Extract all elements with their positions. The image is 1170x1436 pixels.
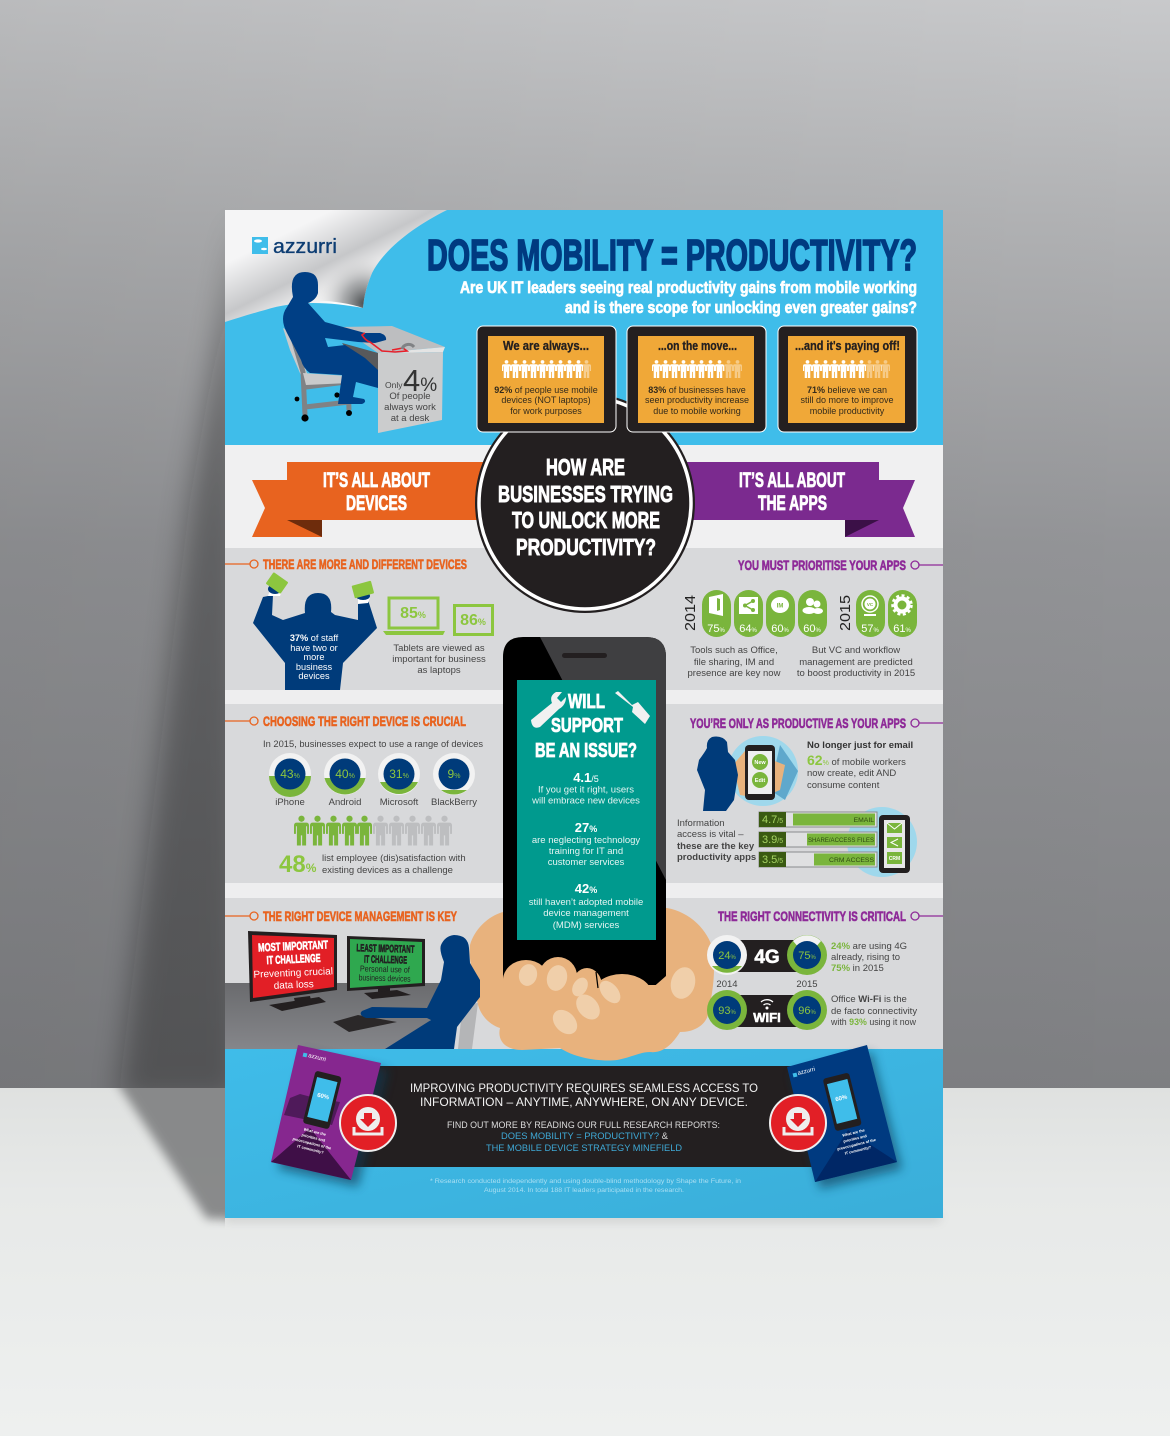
footnote: August 2014. In total 188 IT leaders participated in the research. (484, 1187, 684, 1194)
monitor: least important challenge: LEAST IMPORTANT (356, 942, 415, 956)
support panel content: 42% (575, 881, 597, 896)
report cover: purple: priorities and (301, 1133, 326, 1143)
connectivity: 4G row: 2015 (796, 979, 818, 990)
pill: video conferencing 57%: 57% (861, 623, 879, 635)
monitor: most important challenge (248, 931, 337, 1011)
report cover: blue (787, 1045, 902, 1189)
bar: email 4.7 (759, 812, 877, 827)
report cover: blue: preoccupations of the (837, 1138, 876, 1151)
text: VC and workflow predicted (797, 645, 915, 679)
text: 4G stats: already, rising to (831, 952, 900, 963)
poster background bands (225, 210, 943, 1049)
text: WiFi stats: with 93% using it now (830, 1017, 916, 1028)
illustration: person seated at desk (283, 272, 445, 433)
illustration: man holding two devices: business (296, 662, 333, 672)
connectivity: 4G row: 75% (798, 950, 816, 962)
pill: office 75% (702, 590, 731, 637)
subtitle: and is there scope for unlocking even greater gains? (565, 299, 917, 317)
ribbon: apps: IT’S ALL ABOUT (739, 469, 845, 492)
icon: screwdriver (615, 691, 650, 724)
bar: share files 3.9 (759, 832, 877, 847)
report cover: blue: azzurri (797, 1067, 816, 1077)
circle heading: how are businesses trying to unlock more productivity: TO UNLOCK MORE (512, 507, 660, 533)
heading: must prioritise apps: YOU MUST PRIORITISE YOUR APPS (738, 557, 906, 573)
label: 2014: 2014 (682, 595, 699, 631)
stat: laptop 85%: 85% (400, 605, 426, 622)
illustration: keyboard (333, 1015, 397, 1032)
donut: Microsoft 31%: 31% (389, 767, 409, 781)
heading: only as productive as apps: YOU’RE ONLY AS PRODUCTIVE AS YOUR APPS (690, 715, 906, 731)
stat: 48% dissatisfaction: list employee (dis)satisfaction with (322, 853, 466, 864)
tablet: paying off: still do more to improve (800, 395, 894, 405)
text: key productivity apps: these are the key (677, 841, 755, 852)
text: WiFi stats: Office Wi-Fi is the (831, 994, 907, 1005)
illustration: fingers over phone (503, 957, 699, 1040)
text: WiFi stats: de facto connectivity (831, 1006, 917, 1017)
ribbon: devices: DEVICES (346, 492, 407, 515)
donut: Microsoft 31%: Microsoft (380, 797, 419, 808)
text: tablets as important as laptops (392, 643, 486, 676)
ribbon: devices (252, 462, 487, 537)
ribbon: apps (684, 462, 915, 537)
pill: workflow 61% (888, 590, 917, 637)
heading: right device management (225, 908, 457, 924)
tablet: on the move (627, 326, 766, 432)
stat: only 4% at a desk: Of people (389, 391, 431, 402)
report cover: purple: IT community? (297, 1144, 325, 1155)
connectivity: WiFi row: 96% (798, 1005, 816, 1017)
footer call to action: THE MOBILE DEVICE STRATEGY MINEFIELD (486, 1143, 682, 1154)
stat: only 4% at a desk: at a desk (391, 413, 430, 424)
text: tools key now (688, 645, 781, 679)
illustration: man holding two devices: have two or (290, 643, 338, 653)
pill: share 64% (734, 590, 763, 637)
logo: azzurri: azzurri (273, 236, 337, 258)
text: VC and workflow predicted: to boost productivity in 2015 (797, 668, 915, 679)
donut: iPhone 43%: 43% (280, 767, 300, 781)
illustration: man holding two devices: more (304, 652, 324, 662)
text: 4G stats (831, 941, 907, 974)
report cover: purple: What are the (303, 1127, 326, 1137)
monitor: most important challenge: MOST IMPORTANT (258, 939, 328, 954)
illustration: desk surface (225, 983, 470, 1049)
download button: purple report (340, 1095, 396, 1151)
stat: laptop 85% (383, 598, 445, 635)
donut: iPhone 43% (269, 753, 311, 808)
subtitle: Are UK IT leaders seeing real productivity gains from mobile working (460, 279, 917, 297)
bar: CRM 3.5: CRM ACCESS (829, 857, 874, 864)
heading: choosing the right device (225, 713, 466, 729)
donut: BlackBerry 9%: 9% (448, 767, 460, 781)
connectivity: 4G row: 4G (754, 947, 780, 968)
heading: there are more and different devices: THERE ARE MORE AND DIFFERENT DEVICES (263, 556, 467, 572)
stat: tablet 86% (454, 606, 492, 634)
tablet: we are always: We are always... (503, 339, 589, 353)
illustration: hands behind phone (470, 908, 714, 1060)
text: tools key now: Tools such as Office, (690, 645, 778, 656)
support panel content: still haven’t adopted mobile (529, 897, 643, 908)
pill: IM 60%: 60% (771, 623, 789, 635)
tablet: we are always: devices (NOT laptops) (501, 395, 591, 405)
connectivity: WiFi row: 93% (718, 1005, 736, 1017)
illustration: man holding two devices: 37% of staff (290, 633, 339, 643)
text: tablets as important as laptops: Tablets are viewed as (393, 643, 485, 654)
circle heading: how are businesses trying to unlock more productivity: HOW ARE (546, 454, 625, 480)
donut: Android 40% (324, 753, 366, 808)
monitor: most important challenge: Preventing crucial (253, 966, 333, 981)
heading: choosing the right device: CHOOSING THE RIGHT DEVICE IS CRUCIAL (263, 713, 466, 729)
monitor: least important challenge: business devices (359, 972, 411, 984)
support panel content (529, 691, 650, 931)
text: key productivity apps: Information (677, 818, 725, 829)
app phone with circle: CRM (889, 856, 900, 862)
ribbon: devices: IT’S ALL ABOUT (323, 469, 430, 492)
donut: iPhone 43%: iPhone (275, 797, 305, 808)
bar: share files 3.9: 3.9/5 (762, 834, 783, 846)
footer headline: IMPROVING PRODUCTIVITY REQUIRES SEAMLESS ACCESS TO (410, 1081, 758, 1095)
circle heading: how are businesses trying to unlock more productivity: PRODUCTIVITY? (516, 534, 656, 560)
tablet: paying off (778, 326, 917, 432)
report cover: purple: preoccupations of the (292, 1137, 332, 1150)
connectivity: WiFi row (707, 990, 827, 1030)
pill: workflow 61%: 61% (893, 623, 911, 635)
tablet: we are always: 92% of people use mobile (494, 385, 598, 395)
pill: office 75%: 75% (707, 623, 725, 635)
report cover: blue: What are the (842, 1128, 865, 1138)
monitor: most important challenge: IT CHALLENGE (266, 953, 321, 967)
heading: right connectivity: THE RIGHT CONNECTIVITY IS CRITICAL (718, 908, 906, 924)
stat: only 4% at a desk: 4% (403, 363, 437, 398)
download button: blue report (770, 1095, 826, 1151)
tablet: we are always (477, 326, 616, 432)
stat: 48% dissatisfaction: 48% (279, 851, 317, 878)
text: 62% create edit consume: consume content (807, 780, 880, 791)
text: key productivity apps: productivity apps (677, 852, 756, 863)
report cover: blue: IT community? (844, 1145, 872, 1156)
support panel content: 27% (575, 820, 597, 835)
stat: 48% dissatisfaction (279, 851, 466, 878)
pill: presence 60%: 60% (803, 623, 821, 635)
illustration: person at monitors (361, 935, 480, 1049)
report cover: purple (271, 1045, 388, 1187)
text: 4G stats: 75% in 2015 (831, 963, 884, 974)
tablet: paying off: ...and it's paying off! (795, 339, 900, 353)
monitor: least important challenge (347, 936, 425, 999)
text: key productivity apps (677, 818, 756, 863)
donut: Android 40%: 40% (335, 767, 355, 781)
report cover: purple: 60% (316, 1093, 330, 1102)
circle heading: how are businesses trying to unlock more productivity: BUSINESSES TRYING (498, 481, 673, 507)
support panel content: (MDM) services (553, 920, 619, 931)
support panel content: If you get it right, users (538, 784, 634, 796)
text: tablets as important as laptops: as laptops (417, 665, 461, 676)
illustration: person using phone: New (754, 760, 766, 766)
pill: IM 60% (766, 590, 795, 637)
text: 62% create edit consume (807, 740, 913, 791)
donut: Microsoft 31% (378, 753, 420, 808)
pill: share 64%: 64% (739, 623, 757, 635)
pill: IM 60%: IM (777, 604, 783, 610)
tablet: paying off: mobile productivity (810, 406, 885, 416)
support panel content: 4.1/5 (573, 770, 599, 785)
text: VC and workflow predicted: But VC and workflow (812, 645, 900, 656)
pill: video conferencing 57% (856, 590, 885, 637)
tablet: on the move: 83% of businesses have (648, 385, 746, 395)
donut: Android 40%: Android (329, 797, 361, 808)
bar: email 4.7: EMAIL (854, 817, 874, 824)
illustration: person using phone (697, 736, 798, 811)
text: 62% create edit consume: No longer just for email (807, 740, 913, 751)
text: tools key now: file sharing, IM and (694, 657, 774, 668)
support panel content: training for IT and (549, 846, 623, 857)
subtitle (460, 279, 917, 317)
text: 4G stats: 24% are using 4G (831, 941, 907, 952)
bar: email 4.7: 4.7/5 (762, 814, 783, 826)
bar: CRM 3.5: 3.5/5 (762, 854, 783, 866)
circle heading: how are businesses trying to unlock more productivity (475, 393, 695, 613)
footer headline (410, 1081, 758, 1109)
bar: CRM 3.5 (759, 852, 877, 867)
text: tablets as important as laptops: important for business (392, 654, 486, 665)
footnote (430, 1178, 741, 1194)
support panel content: WILL (568, 691, 605, 713)
illustration: person using phone: Edit (755, 778, 765, 784)
stat: only 4% at a desk: Only (385, 380, 403, 390)
stat: tablet 86%: 86% (460, 612, 486, 629)
heading: right device management: THE RIGHT DEVICE MANAGEMENT IS KEY (263, 908, 457, 924)
stat: only 4% at a desk: always work (384, 402, 436, 413)
report cover: blue: 60% (835, 1094, 849, 1103)
connectivity: 4G row: 24% (718, 950, 736, 962)
support panel content: BE AN ISSUE? (535, 740, 637, 762)
connectivity: WiFi row: WIFI (753, 1010, 781, 1025)
tablet: on the move: seen productivity increase (645, 395, 749, 405)
connectivity: 4G row: 2014 (716, 979, 738, 990)
footer call to action (447, 1120, 720, 1154)
pill: video conferencing 57%: VC (867, 602, 874, 607)
support panel content: SUPPORT (551, 715, 623, 737)
app phone with circle (847, 807, 917, 877)
text: 62% create edit consume: 62% of mobile workers (807, 752, 906, 768)
monitor: least important challenge: Personal use of (360, 963, 411, 975)
label: 2015: 2015 (837, 595, 854, 631)
stat: 48% dissatisfaction: existing devices as a challenge (322, 865, 453, 876)
tablet: on the move: ...on the move... (658, 339, 737, 353)
donut: BlackBerry 9%: BlackBerry (431, 797, 477, 808)
monitor: most important challenge: data loss (274, 979, 314, 992)
footer panel (225, 1049, 943, 1218)
report cover: blue: priorities and (843, 1134, 868, 1144)
text: tools key now: presence are key now (688, 668, 781, 679)
support panel content: device management (543, 908, 629, 919)
support panel content: are neglecting technology (532, 835, 640, 846)
icon: wrench (531, 692, 566, 728)
report cover: purple: azzurri (308, 1053, 326, 1063)
text: key productivity apps: access is vital – (677, 829, 744, 840)
illustration: man holding two devices (253, 572, 377, 690)
title: DOES MOBILITY = PRODUCTIVITY? (427, 231, 917, 280)
stat: only 4% at a desk (384, 363, 437, 424)
text: range of devices intro: In 2015, businesses expect to use a range of devices (263, 739, 483, 750)
footer call to action: FIND OUT MORE BY READING OUR FULL RESEARCH REPORTS: (447, 1120, 720, 1131)
tablet: on the move: due to mobile working (653, 406, 741, 416)
page curl corner (225, 210, 447, 322)
footer headline: INFORMATION – ANYTIME, ANYWHERE, ON ANY DEVICE. (420, 1095, 748, 1109)
tablet: paying off: 71% believe we can (807, 385, 887, 395)
support panel content: will embrace new devices (531, 796, 640, 806)
pictogram: five of ten people (294, 816, 452, 846)
text: 62% create edit consume: now create, edit AND (807, 768, 896, 779)
footnote: * Research conducted independently and using double-blind methodology by Shape the Future, in (430, 1178, 741, 1185)
monitor: least important challenge: IT CHALLENGE (364, 953, 407, 967)
connectivity: 4G row (707, 935, 827, 990)
illustration: man holding two devices: devices (298, 671, 330, 681)
text: VC and workflow predicted: management are predicted (799, 657, 913, 668)
heading: there are more and different devices (225, 556, 467, 572)
donut: BlackBerry 9% (431, 753, 477, 808)
tablet: we are always: for work purposes (510, 406, 582, 416)
bar: share files 3.9: SHARE/ACCESS FILES (808, 837, 874, 844)
support panel content: customer services (548, 857, 625, 868)
footer call to action: DOES MOBILITY = PRODUCTIVITY? & (501, 1131, 669, 1142)
ribbon: apps: THE APPS (758, 492, 827, 515)
phone body (503, 637, 666, 990)
text: WiFi stats (830, 994, 917, 1028)
pill: presence 60% (798, 590, 827, 637)
